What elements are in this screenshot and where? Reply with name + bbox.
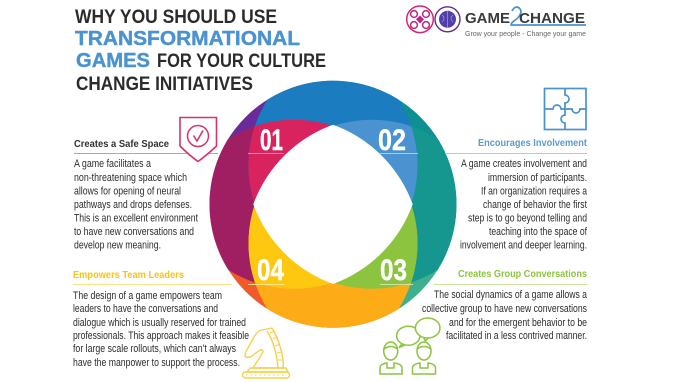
panel: encourages involvement: Encourages Involvement [478,137,587,149]
panel: encourages involvement: involvement and deeper learning. [460,240,587,252]
icon: puzzle [544,88,586,130]
panel: empowers team leaders: The design of a game empowers team [73,290,222,302]
panel: creates a safe space: pathways and drops defenses. [74,199,192,211]
panel: empowers team leaders: professionals. This approach makes it feasible [73,330,249,342]
number 04: 04 [257,254,284,287]
panel: creates a safe space: to have new conversations and [74,226,194,238]
panel: creates a safe space: Creates a Safe Space [74,138,169,150]
panel: encourages involvement: step is to go beyond telling and [468,212,587,224]
panel: creates group conversations: facilitated in a less contrived manner. [446,330,587,342]
title: GAMES [76,50,150,72]
icon: chess knight [242,328,290,378]
divider line: group conversations [380,284,587,286]
title [75,7,326,95]
number 03: 03 [380,254,407,287]
number 02: 02 [378,124,406,157]
panel: creates group conversations: The social dynamics of a game allows a [434,289,588,301]
panel: creates a safe space: A game facilitates a [74,158,152,170]
panel: empowers team leaders: dialogue which is usually reserved for trained [73,317,246,329]
panel: encourages involvement: change of behavior the first [483,199,587,211]
logo: Game2Change: Grow your people - Change your game [465,29,586,38]
divider line: safe space [74,152,284,154]
logo: Game2Change: GAME [465,11,510,27]
panel: encourages involvement: teaching into the space of [489,226,588,238]
panel: empowers team leaders: leaders to have the conversations and [73,303,218,315]
title: WHY YOU SHOULD USE [75,7,277,28]
panel: empowers team leaders: have the manpower to support the process. [73,357,240,369]
panel: creates a safe space: non-threatening space which [74,172,187,184]
panel: encourages involvement: If an organization requires a [481,186,588,198]
title: TRANSFORMATIONAL [75,28,300,50]
title: FOR YOUR CULTURE [157,51,326,72]
logo: Game2Change: CHANGE [519,11,585,27]
logo: Game2Change [407,6,586,38]
divider line: team leaders [73,284,284,286]
panel: creates a safe space: This is an excellent environment [74,212,198,224]
number 01: 01 [260,124,283,157]
panel: empowers team leaders [73,269,249,369]
panel: encourages involvement [460,137,588,252]
divider line: involvement [380,152,587,154]
panel: creates a safe space [74,138,198,252]
title: CHANGE INITIATIVES [76,74,253,95]
panel: empowers team leaders: for large scale rollouts, which can't always [73,343,236,355]
panel: creates group conversations [422,268,588,342]
panel: creates group conversations: and for the emergent behavior to be [449,317,587,329]
panel: creates group conversations: collective group to have new conversations [422,303,587,315]
panel: encourages involvement: immersion of participants. [488,172,587,184]
panel: empowers team leaders: Empowers Team Leaders [73,269,184,281]
panel: creates a safe space: allows for opening of neural [74,186,181,198]
ring diagram [209,80,459,330]
panel: creates a safe space: develop new meaning. [74,240,161,252]
panel: creates group conversations: Creates Group Conversations [458,268,587,280]
icon: shield with check [180,118,216,162]
icon: two people talking [380,318,440,374]
panel: encourages involvement: A game creates involvement and [461,158,587,170]
